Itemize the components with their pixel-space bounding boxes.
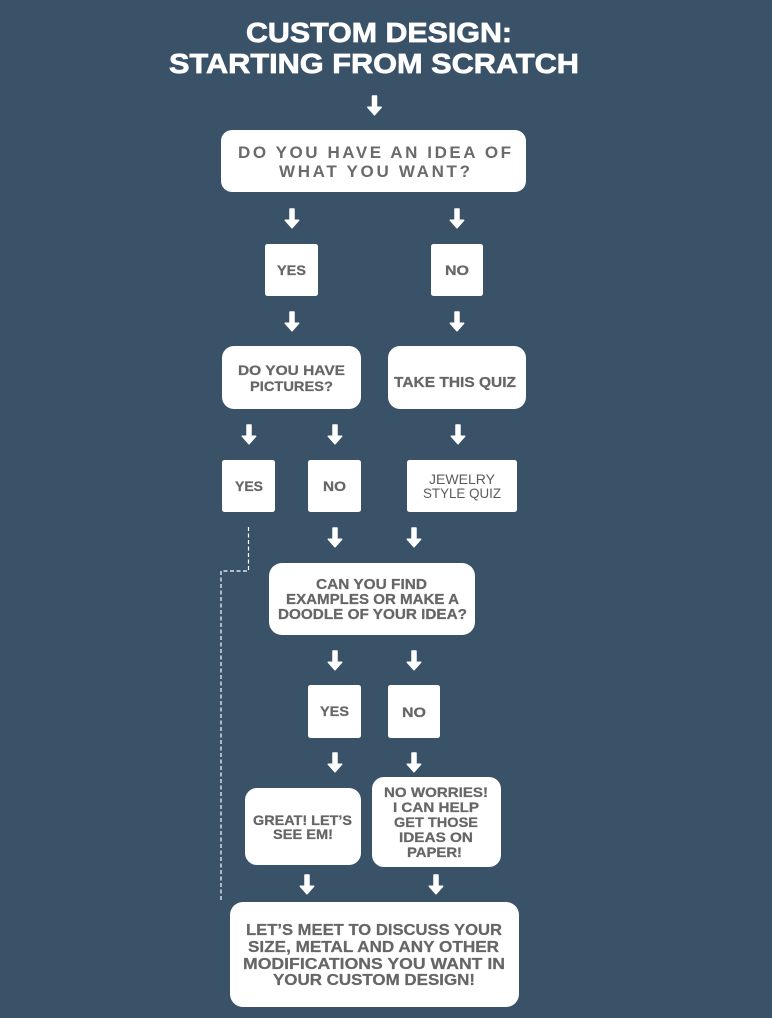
panel: great, let's see em: SEE EM! <box>273 826 333 842</box>
panel: no worries: PAPER! <box>407 844 462 860</box>
arrow: idea to no <box>450 209 464 228</box>
panel: find examples or doodle: EXAMPLES OR MAKE A <box>286 592 460 608</box>
arrow: pictures to no <box>328 425 342 444</box>
arrow: examples to no <box>407 651 421 670</box>
box: examples no <box>388 685 440 738</box>
panel: final meeting: MODIFICATIONS YOU WANT IN <box>243 956 505 973</box>
arrow: examples to yes <box>328 651 342 670</box>
panel: no worries: I CAN HELP <box>393 799 479 815</box>
box: no: NO <box>445 262 469 278</box>
box: examples no: NO <box>402 704 426 720</box>
panel: final meeting: SIZE, METAL AND ANY OTHER <box>248 939 499 956</box>
arrow: no to quiz <box>450 312 464 331</box>
box: jewelry style quiz: STYLE QUIZ <box>423 485 501 501</box>
panel: do you have an idea <box>221 130 526 192</box>
box: jewelry style quiz <box>407 460 517 512</box>
panel: take this quiz <box>388 346 526 409</box>
panel: find examples or doodle <box>269 563 475 635</box>
title: STARTING FROM SCRATCH <box>169 48 579 79</box>
panel: great, let's see em: GREAT! LET’S <box>253 812 352 828</box>
arrow: yes to pictures <box>285 312 299 331</box>
arrow: title to first question <box>368 96 381 115</box>
panel: no worries <box>372 777 501 867</box>
panel: do you have pictures: PICTURES? <box>250 378 333 394</box>
panel: take this quiz: TAKE THIS QUIZ <box>394 375 516 391</box>
panel: do you have an idea: DO YOU HAVE AN IDEA OF <box>238 143 511 162</box>
box: pictures no: NO <box>323 478 346 494</box>
panel: final meeting: YOUR CUSTOM DESIGN! <box>273 972 475 989</box>
panel: no worries: IDEAS ON <box>399 829 473 845</box>
box: pictures no <box>308 460 361 512</box>
arrow: great to final meeting <box>300 875 314 894</box>
title: CUSTOM DESIGN: <box>246 17 512 48</box>
box: yes: YES <box>277 262 306 278</box>
panel: find examples or doodle: DOODLE OF YOUR IDEA? <box>278 607 467 623</box>
box: examples yes: YES <box>320 703 349 719</box>
panel: find examples or doodle: CAN YOU FIND <box>316 577 427 593</box>
arrow: no worries to final meeting <box>429 875 443 894</box>
panel: do you have pictures <box>222 346 361 409</box>
arrow: quiz to jewelry style quiz <box>451 425 465 444</box>
box: pictures yes <box>222 460 275 512</box>
panel: no worries: NO WORRIES! <box>384 784 488 800</box>
arrow: no to no worries <box>407 753 421 772</box>
dashed connector: pictures yes to final meeting <box>221 527 248 900</box>
arrow: jewelry quiz to examples <box>407 528 421 547</box>
arrow: yes to great <box>328 753 342 772</box>
box: yes <box>265 244 318 296</box>
box: examples yes <box>308 685 361 738</box>
arrow: no to examples <box>328 528 342 547</box>
panel: final meeting: LET’S MEET TO DISCUSS YOUR <box>246 922 502 939</box>
panel: final meeting <box>230 902 519 1007</box>
panel: great, let's see em <box>245 788 361 865</box>
panel: do you have pictures: DO YOU HAVE <box>238 362 345 378</box>
arrow: pictures to yes <box>242 425 256 444</box>
title <box>169 17 579 79</box>
box: jewelry style quiz: JEWELRY <box>429 471 496 487</box>
panel: no worries: GET THOSE <box>394 814 478 830</box>
arrow: idea to yes <box>285 209 299 228</box>
panel: do you have an idea: WHAT YOU WANT? <box>279 162 470 181</box>
box: pictures yes: YES <box>235 478 263 494</box>
box: no <box>431 244 483 296</box>
